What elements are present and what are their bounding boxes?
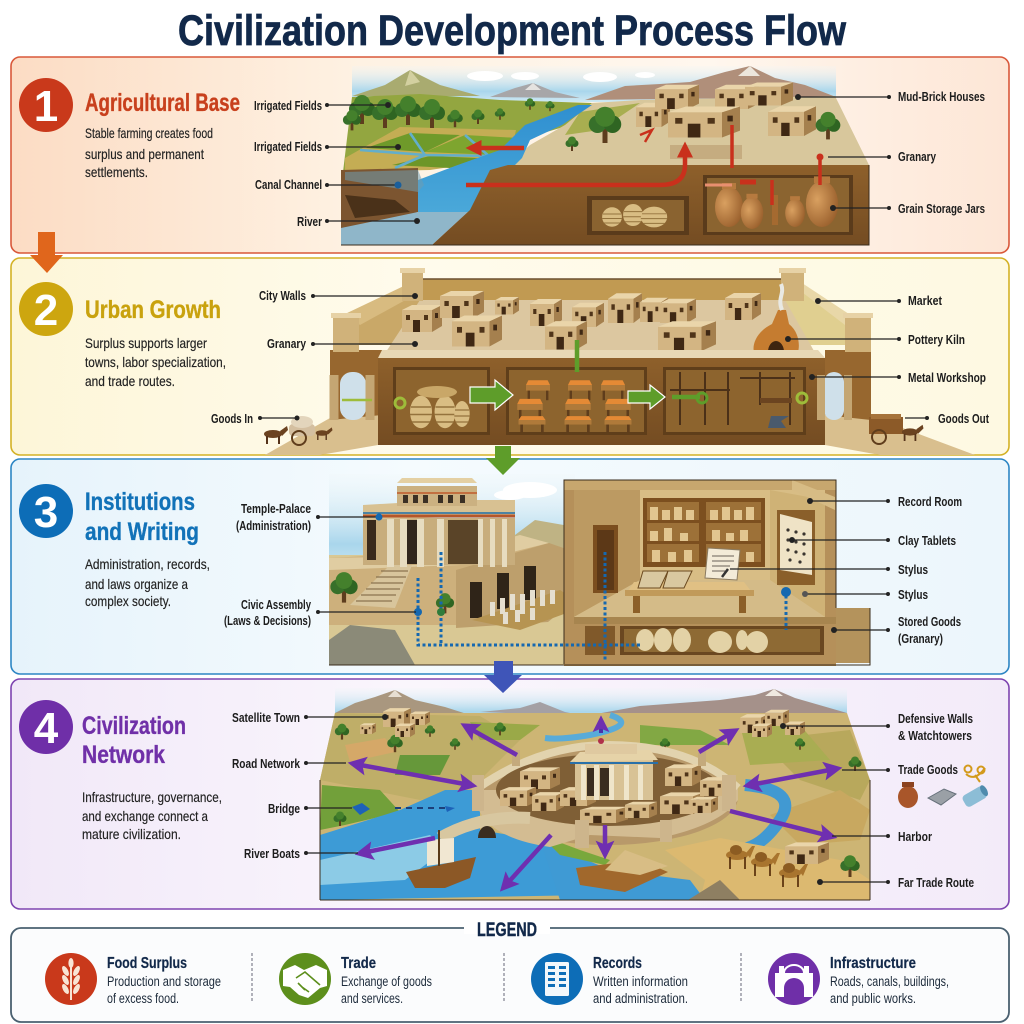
step 2 badge: 2 [34,286,58,335]
label: granary [267,336,418,351]
label: clay tablets: Clay Tablets [898,533,956,548]
label: far trade route [817,875,974,890]
trade text [341,955,432,1006]
label: mud-brick houses [795,89,985,104]
panel: institutions and writing [11,459,1009,674]
label: river boats [244,846,358,861]
label: goods in: Goods In [211,411,253,426]
illustration: temple-palace and record room [329,474,870,666]
icon: metal ingot [928,789,956,805]
description 3 [85,556,210,609]
label: city walls: City Walls [259,288,306,303]
label: temple-palace: (Administration) [236,518,311,533]
heading: urban growth: Urban Growth [85,296,221,324]
label: defensive walls and watchtowers: Defensive Walls [898,711,973,726]
food surplus text: Food Surplus [107,955,187,972]
description 1: Stable farming creates food [85,125,213,141]
legend frame [11,928,1009,1022]
label: road network: Road Network [232,756,301,771]
label: stored goods [831,614,961,646]
label: river boats: River Boats [244,846,300,861]
description 1 [85,125,213,180]
icon: clay pot [898,782,918,808]
heading: civilization network [82,712,186,769]
label: goods out: Goods Out [938,411,989,426]
label: city walls [259,288,418,303]
icon: wheat [45,953,97,1005]
label: stylus (upper): Stylus [898,562,928,577]
heading: institutions and writing: Institutions [85,488,195,516]
legend item: infrastructure [768,953,949,1006]
label: irrigated fields (lower): Irrigated Fields [254,139,322,154]
label: river [297,214,420,229]
description 2: Surplus supports larger [85,335,207,351]
heading: institutions and writing [85,488,199,546]
label: granary [816,149,937,164]
label: defensive walls and watchtowers [780,711,973,743]
heading: agricultural base: Agricultural Base [85,89,240,117]
label: goods in [211,411,300,426]
label: far trade route: Far Trade Route [898,875,974,890]
arrow: step 2 to step 3 [486,446,520,475]
label: stylus (lower): Stylus [898,587,928,602]
label: pottery kiln: Pottery Kiln [908,332,965,347]
heading: civilization network: Network [82,741,165,769]
label: stylus (upper) [722,562,928,577]
label: market [815,293,943,308]
label: trade goods: Trade Goods [898,762,958,777]
description 4: mature civilization. [82,826,181,842]
label: metal workshop [809,370,986,385]
label: pottery kiln [785,332,965,347]
step 3 badge: 3 [34,488,58,537]
kiln [754,310,799,352]
description 1: settlements. [85,164,148,180]
records text [593,955,688,1006]
legend title: LEGEND [477,920,537,941]
panel 1 background [11,57,1009,253]
label: market: Market [908,293,943,308]
description 4: Infrastructure, governance, [82,789,222,805]
panel 3 background [11,459,1009,674]
trade text: and services. [341,991,403,1006]
trade text: Exchange of goods [341,974,432,989]
heading: institutions and writing: and Writing [85,518,199,546]
panel: urban growth [11,258,1009,455]
food surplus text: of excess food. [107,991,179,1006]
trade text: Trade [341,955,376,972]
icon: cloth roll [961,784,990,808]
step 1 badge: 1 [34,82,58,131]
label: trade goods [842,762,958,777]
label: irrigated fields (upper) [254,98,391,113]
infrastructure text: Infrastructure [830,955,916,972]
infrastructure text [830,955,949,1006]
label: granary: Granary [898,149,937,164]
description 4 [82,789,222,842]
label: canal channel: Canal Channel [255,177,322,192]
label: bridge [268,801,352,816]
food surplus text [107,955,221,1006]
panel: civilization network [11,679,1009,909]
legend item: food surplus [45,953,221,1006]
arrow: step 1 to step 2 [30,232,63,273]
label: canal channel [255,177,402,192]
description 2: towns, labor specialization, [85,354,226,370]
label: stored goods: (Granary) [898,631,943,646]
legend item: trade [279,953,432,1006]
label: river: River [297,214,322,229]
label: irrigated fields (lower) [254,139,401,154]
step 4 badge: 4 [34,704,59,753]
icon: golden ornament [964,766,985,782]
label: bridge: Bridge [268,801,300,816]
description 2: and trade routes. [85,373,175,389]
food surplus text: Production and storage [107,974,221,989]
panel 4 background [11,679,1009,909]
icon: record tablet [531,953,583,1005]
label: record room [807,494,962,509]
title: Civilization Development Process Flow [178,7,846,55]
label: goods out [905,411,989,426]
step 3 badge [19,484,73,538]
label: record room: Record Room [898,494,962,509]
step 2 badge [19,282,73,336]
illustration: farmland cutaway [341,66,869,245]
label: defensive walls and watchtowers: & Watchtowers [898,728,972,743]
label: stored goods: Stored Goods [898,614,961,629]
label: clay tablets [789,533,956,548]
label: temple-palace: Temple-Palace [241,501,311,516]
step 1 badge [19,78,73,132]
description 1: surplus and permanent [85,146,204,162]
legend panel [11,920,1009,1022]
label: stylus (lower) [802,587,928,602]
panel 2 background [11,258,1009,455]
description 4: and exchange connect a [82,808,208,824]
label: granary: Granary [267,336,307,351]
description 3: complex society. [85,593,171,609]
label: harbor [832,829,932,844]
illustration: walled city cutaway [264,268,975,455]
heading: civilization network: Civilization [82,712,186,740]
step 4 badge [19,700,73,754]
description 3: and laws organize a [85,576,188,592]
label: metal workshop: Metal Workshop [908,370,986,385]
infrastructure text: Roads, canals, buildings, [830,974,949,989]
label: civic assembly: (Laws & Decisions) [224,613,311,628]
records text: Records [593,955,642,972]
label: grain storage jars [830,201,985,216]
label: satellite town: Satellite Town [232,710,300,725]
legend item: records [531,953,688,1006]
label: civic assembly [224,597,416,628]
icon: handshake [279,953,331,1005]
records text: and administration. [593,991,688,1006]
description 3: Administration, records, [85,556,210,572]
panel: agricultural base [11,57,1009,253]
label: grain storage jars: Grain Storage Jars [898,201,985,216]
label: satellite town [232,710,388,725]
icon: bridge gate [768,953,820,1005]
arrow: step 3 to step 4 [484,661,522,693]
label: temple-palace [236,501,382,533]
label: harbor: Harbor [898,829,932,844]
label: irrigated fields (upper): Irrigated Fields [254,98,322,113]
description 2 [85,335,226,389]
illustration: regional city network [320,688,870,900]
label: mud-brick houses: Mud-Brick Houses [898,89,985,104]
infrastructure text: and public works. [830,991,916,1006]
label: civic assembly: Civic Assembly [241,597,312,612]
records text: Written information [593,974,688,989]
